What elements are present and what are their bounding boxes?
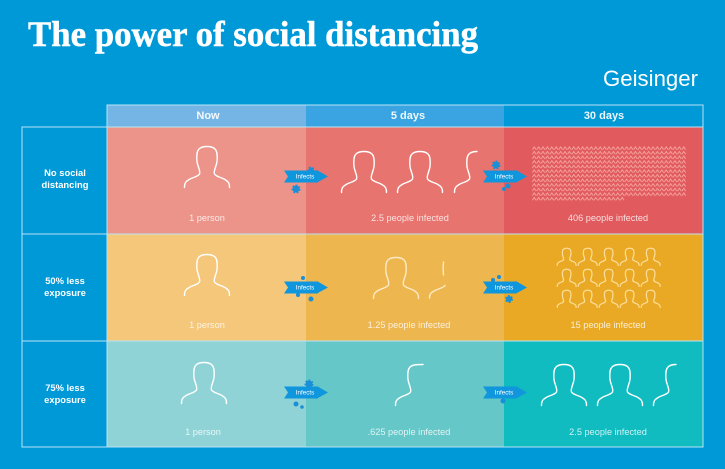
icons: 406 people grid: [532, 146, 686, 201]
arrow: row 3 now to 5 days: [284, 380, 328, 409]
arrow: row 2 now to 5 days: Infects: [296, 284, 314, 292]
arrow: row 2 now to 5 days: [284, 276, 328, 302]
icon: .625 person: [396, 364, 423, 406]
icons: 2.5 people: [542, 364, 676, 406]
arrow: row 2 5 days to 30 days: [483, 275, 527, 302]
logo: Geisinger: Geisinger: [603, 66, 698, 91]
icon: one person: [182, 362, 226, 404]
caption: 406 people infected: 406 people infected: [568, 213, 648, 223]
row label: exposure: [44, 394, 86, 405]
icons: 15 people grid: [557, 248, 660, 307]
icons: 2.5 people: [342, 152, 477, 192]
arrow: row 1 now to 5 days: Infects: [296, 174, 314, 180]
arrow: row 2 5 days to 30 days: Infects: [495, 284, 513, 292]
caption: 1 person: 1 person: [189, 320, 225, 330]
caption: 2.5 people infected: 2.5 people infected: [371, 213, 449, 223]
caption: 1 person: 1 person: [189, 213, 225, 223]
table header: [107, 105, 703, 127]
row: 50% less exposure: [44, 234, 703, 341]
row label: distancing: [42, 179, 89, 190]
header: 30 days: 30 days: [584, 110, 624, 122]
row label: 75% less: [45, 382, 85, 393]
row label: 50% less: [45, 275, 85, 286]
caption: .625 people infected: .625 people infected: [368, 427, 450, 437]
arrow: row 3 5 days to 30 days: [483, 386, 527, 404]
caption: 2.5 people infected: 2.5 people infected: [569, 427, 647, 437]
header: Now: Now: [196, 110, 220, 122]
title: The power of social distancing: [28, 14, 478, 54]
row: 75% less exposure: [44, 341, 703, 447]
arrow: row 3 5 days to 30 days: Infects: [495, 390, 513, 396]
row label: exposure: [44, 287, 86, 298]
arrow: row 1 5 days to 30 days: [483, 162, 527, 191]
header: 5 days: 5 days: [391, 110, 425, 122]
arrow: row 3 now to 5 days: Infects: [296, 390, 314, 396]
icons: 1.25 people: [374, 258, 445, 298]
caption: 15 people infected: 15 people infected: [570, 320, 646, 330]
table grid lines: [22, 127, 703, 447]
caption: 1.25 people infected: 1.25 people infected: [368, 320, 450, 330]
arrow: row 1 5 days to 30 days: Infects: [495, 174, 513, 180]
icon: one person: [184, 146, 230, 188]
icon: one person: [184, 254, 230, 296]
row: No social distancing: [42, 127, 703, 234]
arrow: row 1 now to 5 days: [284, 168, 328, 192]
caption: 1 person: 1 person: [185, 427, 221, 437]
row label: No social: [44, 167, 86, 178]
